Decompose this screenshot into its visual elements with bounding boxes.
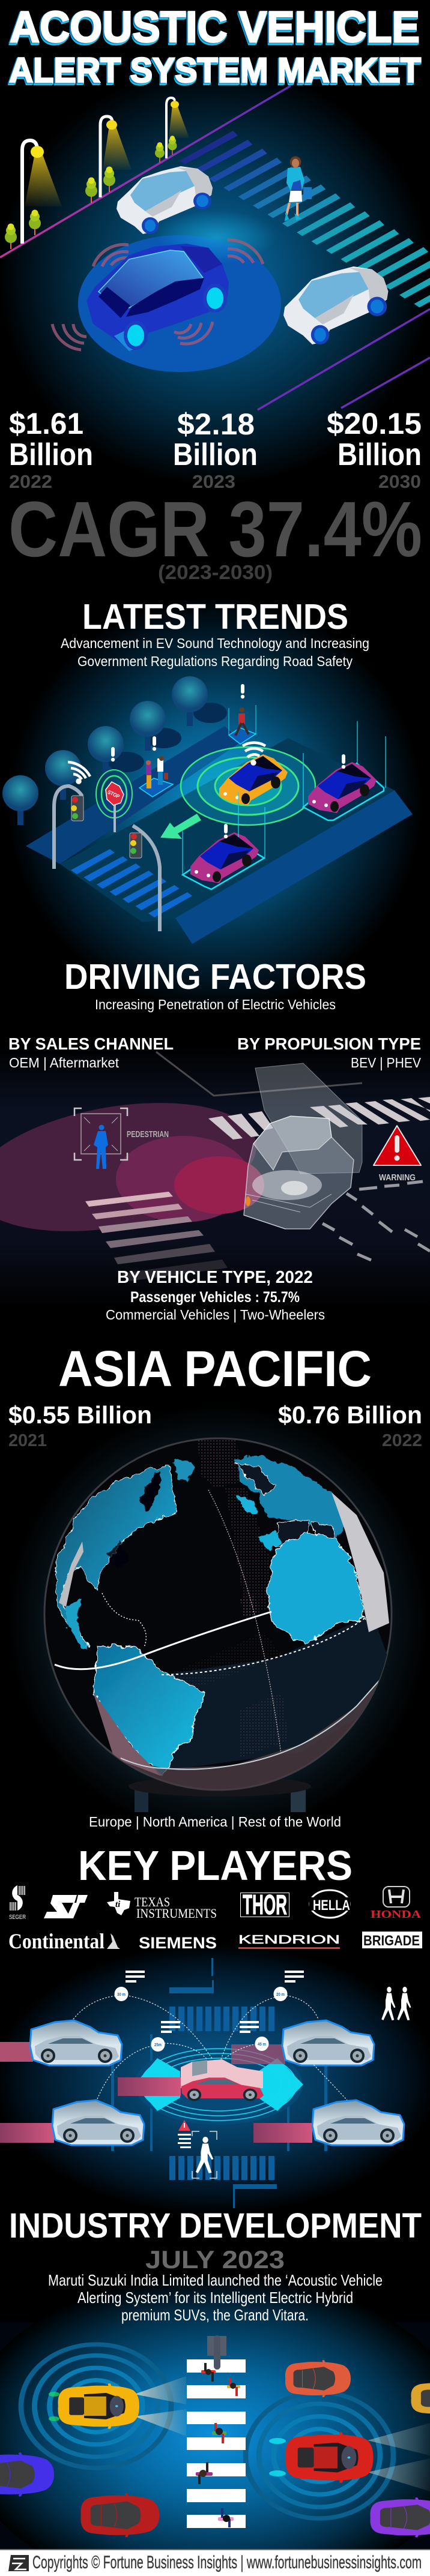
purple road edges [0,86,430,410]
north america [54,1465,175,1648]
latest trends text [61,635,369,669]
stand [129,1776,311,1812]
car bottom-right [312,2100,404,2145]
logo: Texas Instruments: TEXAS [135,1894,170,1909]
logo: Brigade: BRIGADE [363,1933,420,1949]
by propulsion type: BEV | PHEV [351,1055,422,1070]
market size figures: $1.61 [9,407,83,440]
2021 value [8,1401,152,1450]
asia pacific heading: ASIA PACIFIC [58,1341,372,1397]
crosswalk [180,131,430,307]
by sales channel: BY SALES CHANNEL [8,1034,174,1053]
pink car right [303,721,386,820]
blue car scan zone [78,235,281,372]
latest trends text: Advancement in EV Sound Technology and Increasing [61,635,369,651]
warning label: WARNING [379,1172,416,1183]
lower glass rim [125,1683,378,1790]
crosswalk [71,849,192,917]
logo: Kendrion [238,1933,340,1949]
market size figures: $2.18 [177,407,255,441]
road edge lines [156,1052,362,1096]
distance badges: 45 m [258,2043,266,2047]
green tail glow [49,2392,59,2421]
gloss highlights [332,1492,389,1632]
by propulsion type: BY PROPULSION TYPE [237,1034,421,1053]
sound waves [52,240,263,350]
orange car [219,754,288,805]
yellow car waves [21,2344,171,2468]
hero illustration: road scene with cars [0,66,430,486]
market size figures: Billion [173,437,258,472]
distance badges: 20 m [276,1993,285,1997]
logo: Texas Instruments [107,1892,217,1921]
pedestrians top right [381,1987,411,2020]
red car [80,2493,160,2538]
truck [244,1063,362,1229]
driving factors heading: DRIVING FACTORS [64,957,366,997]
crossing stripes lower [85,1192,228,1281]
cyan tail glow [269,2438,286,2476]
equator lines [55,1612,271,1669]
logo: Hella: HELLA [313,1897,350,1914]
driving factors scene [0,1044,430,1308]
title: ACOUSTIC VEHICLE [10,3,420,52]
title: ALERT SYSTEM MARKET [9,51,421,90]
2021 value: 2021 [8,1431,47,1450]
pink car bottom [183,792,265,889]
2021 value: $0.55 Billion [8,1401,152,1429]
logo: Kendrion: KENDRION [238,1933,340,1947]
list icons [126,1971,304,2033]
central america [65,1599,87,1650]
road surface [60,738,395,922]
people shaking hands [139,756,173,797]
logo: Honda: HONDA [371,1908,421,1920]
logo: Seger [9,1885,26,1921]
other regions: Europe | North America | Rest of the World [89,1814,341,1830]
sensor ellipse [135,2044,303,2125]
by vehicle type: Commercial Vehicles | Two-Wheelers [106,1307,325,1323]
2022 value [278,1401,422,1450]
iberia [258,1530,282,1551]
bright speckle [240,1596,256,1615]
market size figures: 2022 [9,471,52,492]
mediterranean land [274,1520,310,1548]
company logo [8,2555,29,2571]
british isles [237,1494,257,1512]
wifi icons [68,743,265,782]
motion trails [0,2042,312,2143]
stop sign: STOP [106,789,121,800]
by vehicle type: Passenger Vehicles : 75.7% [130,1289,300,1306]
logo: Siemens: SIEMENS [139,1934,217,1952]
market size figures: Billion [9,437,93,472]
warning icon [374,1126,421,1165]
pedestrian [285,156,312,220]
alert marks [111,684,345,838]
footer [0,2549,430,2576]
logos [8,1885,422,1953]
logo: Honda [371,1887,421,1920]
logo: Thor [240,1889,289,1920]
road dashes [322,1181,430,1260]
pedestrian with detection frame [192,2131,217,2178]
logo: Texas Instruments: ti [115,1900,121,1909]
asia and europe blue [236,1455,345,1540]
by vehicle type [106,1268,325,1323]
africa [267,1533,365,1644]
warning triangle [178,2120,191,2148]
yellow car at edge [411,2380,430,2416]
roadside trees [5,136,177,249]
car top-right [282,2020,374,2065]
date: JULY 2023 [145,2245,285,2274]
title [9,3,421,90]
latest trends heading: LATEST TRENDS [82,597,348,637]
street lamps [22,98,189,244]
warning zones [0,1083,267,1251]
traffic lights [54,786,160,931]
traffic post [207,2335,226,2370]
white car top [117,166,213,234]
logo: Seger: SEGER [9,1914,26,1921]
inner ring [215,767,281,805]
by propulsion type [237,1034,422,1070]
bottom crossing [169,2156,274,2180]
stop sign [96,770,132,832]
green arrow [160,814,201,839]
logo: Hella [309,1890,350,1918]
continents [54,1455,365,1776]
by sales channel [8,1034,174,1070]
distance badges: 25m [154,2043,162,2047]
key players heading: KEY PLAYERS [78,1842,353,1889]
dark lower ocean [162,1614,396,1770]
distance badges [114,1987,287,2052]
2022 value: $0.76 Billion [278,1401,422,1429]
lane markers [111,1958,327,2208]
market size figures: 2030 [378,471,421,492]
latest trends text: Government Regulations Regarding Road Safety [77,653,353,669]
glow [156,210,276,264]
south america [93,1646,204,1776]
distance badges: 30 m [117,1993,126,1997]
market size figures: 2023 [192,471,235,492]
pedestrians from above [196,2363,240,2527]
hudson bay and lakes [139,1470,161,1512]
development text: Alerting System’ for its Intelligent Electric Hybrid [77,2289,353,2307]
CAGR period: (2023-2030) [158,561,273,583]
blue car [86,244,229,351]
center red car [181,2059,264,2101]
pavements [26,726,241,864]
market size figures [9,407,422,492]
car top-left [30,2020,122,2065]
market size figures: $20.15 [327,407,422,440]
pedestrian label: PEDESTRIAN [127,1129,169,1139]
pedestrian detection box [74,1108,127,1169]
driving factors text: Increasing Penetration of Electric Vehicles [95,997,336,1012]
crossing stripes upper [208,1097,430,1139]
zebra crossing [187,2359,246,2528]
development text: premium SUVs, the Grand Vitara. [121,2306,309,2324]
scandinavia [236,1462,275,1497]
walking pedestrian on zone [229,705,256,744]
car bottom-left [52,2100,144,2145]
lower pavement [175,790,413,944]
greenland [173,1459,195,1483]
caribbean coast [102,1593,146,1647]
ADAS illustration [0,1944,430,2214]
orange car [285,2360,351,2397]
purple car [370,2497,430,2538]
development text [48,2271,383,2324]
2022 value: 2022 [382,1431,422,1450]
top crossing [169,2007,274,2031]
by vehicle type: BY VEHICLE TYPE, 2022 [117,1268,313,1287]
yellow car [58,2383,139,2429]
middle ring [198,757,298,815]
white car bottom [283,266,388,344]
meridian [208,1490,281,1754]
headlight beams [135,2376,430,2491]
logo: Texas Instruments: INSTRUMENTS [136,1906,217,1921]
distance arcs [73,1995,347,2100]
signal rings [181,747,315,825]
trees [2,676,227,825]
atlantic speckle [174,1440,286,1756]
latest trends illustration [2,597,422,1011]
red car waves [246,2392,393,2518]
by sales channel: OEM | Aftermarket [9,1055,120,1070]
blue car [0,2452,54,2497]
globe [20,1417,415,1823]
logo: Thor: THOR [243,1889,287,1920]
crossing scene [0,2274,430,2576]
logo: ST [44,1895,88,1918]
red sports car [286,2432,374,2483]
logo: Continental: Continental [8,1929,104,1953]
